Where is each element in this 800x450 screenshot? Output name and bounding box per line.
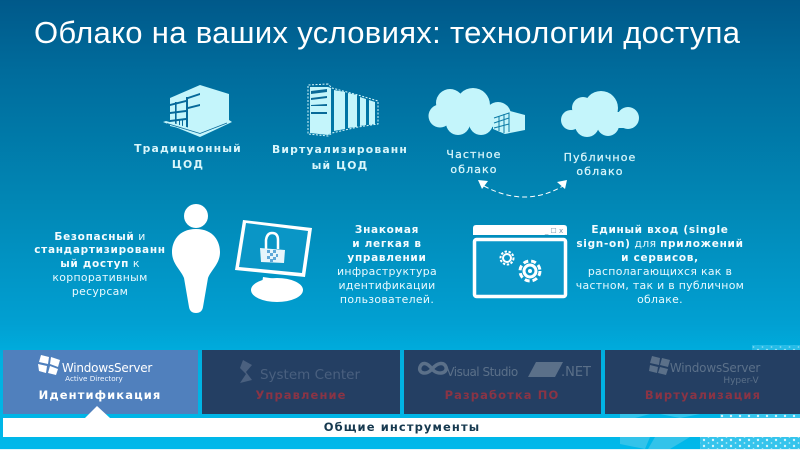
text: single sign-on: sign-on) для приложений (576, 237, 744, 250)
icon: traditional datacenter building (163, 85, 232, 137)
panel: development (404, 350, 601, 414)
panel: management: System Center (260, 367, 360, 383)
panel: identity: Active Directory (65, 374, 124, 383)
bar: common tools: Общие инструменты (324, 420, 480, 434)
text: secure access (34, 230, 166, 298)
text: single sign-on: располагающихся как в (588, 265, 732, 278)
label: traditional datacenter (134, 142, 242, 171)
label: public cloud: облако (576, 165, 624, 178)
icon: application window with gears: _ ☐ x (544, 227, 563, 235)
label: private cloud (446, 148, 502, 176)
text: familiar management (337, 224, 437, 306)
text: familiar management: пользователей. (340, 293, 434, 306)
panel: development: Visual Studio (446, 365, 518, 379)
panel: identity: WindowsServer (62, 361, 152, 375)
icon: public cloud (561, 91, 639, 137)
label: traditional datacenter: Традиционный (134, 142, 242, 155)
panel: virtualization: Hyper-V (723, 376, 760, 386)
panel: identity: Идентификация (39, 388, 161, 402)
text: single sign-on: облаке. (637, 293, 683, 306)
label: virtualized datacenter: Виртуализированн (272, 143, 408, 156)
text: familiar management: идентификации (339, 279, 435, 292)
text: single sign-on: и сервисов, (621, 252, 699, 264)
label: public cloud (564, 151, 636, 178)
decorative lower right pattern (0, 345, 800, 450)
text: familiar management: управлении (347, 252, 427, 264)
text: secure access: стандартизированн (34, 244, 166, 256)
label: private cloud: облако (450, 163, 498, 176)
label: traditional datacenter: ЦОД (172, 158, 204, 171)
label: private cloud: Частное (446, 148, 502, 161)
panel: management: Управление (255, 388, 347, 402)
label: virtualized datacenter (272, 143, 408, 172)
text: secure access: Безопасный и (54, 230, 146, 243)
label: virtualized datacenter: ый ЦОД (312, 159, 368, 172)
bar: common tools (3, 418, 800, 437)
text: secure access: ый доступ к (60, 257, 140, 270)
panel: virtualization: Виртуализация (645, 388, 761, 402)
text: familiar management: инфраструктура (337, 265, 437, 278)
panel: identity (3, 350, 198, 418)
panel: development: .NET (561, 365, 591, 380)
icon: monitor with padlock (235, 220, 312, 302)
icon: application window with gears (473, 225, 567, 296)
text: single sign-on: Единый вход (single (591, 224, 729, 236)
icon: private cloud (428, 88, 525, 135)
panel: development: Разработка ПО (445, 388, 559, 402)
panel: virtualization (605, 350, 800, 414)
arrow: between clouds (478, 180, 567, 197)
panel: virtualization: WindowsServer (670, 361, 760, 375)
icon: virtualized datacenter (308, 84, 378, 136)
text: single sign-on (576, 224, 744, 306)
text: familiar management: и легкая в (352, 238, 422, 250)
text: secure access: корпоративным (52, 271, 148, 284)
title: Облако на ваших условиях: технологии доступа (34, 15, 741, 50)
text: secure access: ресурсам (72, 285, 128, 298)
text: familiar management: Знакомая (355, 224, 419, 236)
label: public cloud: Публичное (564, 151, 636, 164)
icon: person (172, 204, 220, 313)
text: single sign-on: частном, так и в публичном (576, 279, 744, 292)
panel: management (202, 350, 400, 414)
